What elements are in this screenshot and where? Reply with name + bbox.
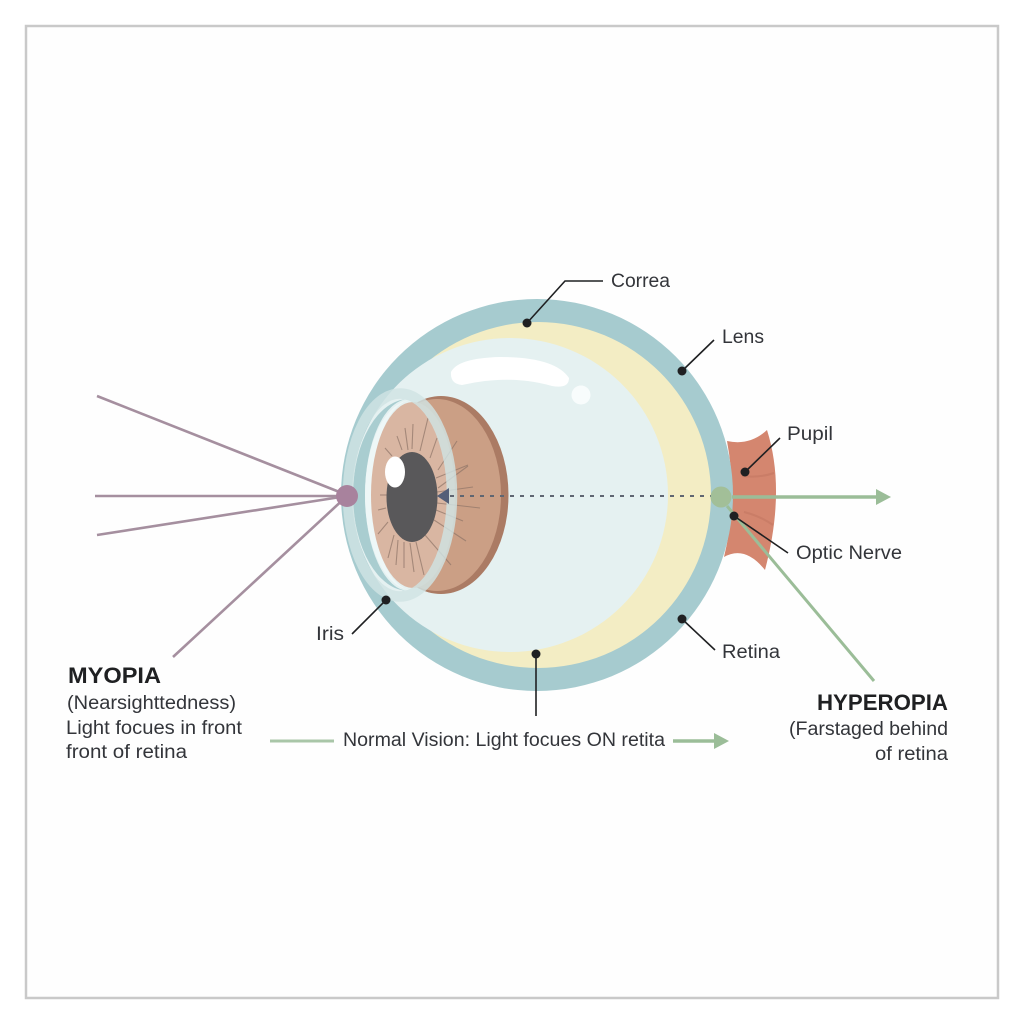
myopia text block: (Nearsighttedness): [67, 693, 236, 714]
vitreous body: [352, 338, 668, 652]
myopia focal point: [336, 485, 358, 507]
hyperopia ray: [727, 506, 874, 681]
iris disc body: [373, 399, 501, 591]
eyeball: [341, 299, 733, 691]
label: Lens: [678, 327, 764, 376]
hyperopia text block: of retina: [875, 744, 948, 765]
label: Lens: Lens: [722, 327, 764, 348]
hyperopia text block: [789, 690, 948, 765]
cornea ring overlay: [348, 394, 452, 596]
top highlight: [451, 357, 569, 387]
label: Pupil: [740, 424, 833, 476]
label: Optic Nerve: [730, 512, 902, 564]
normal vision caption with arrow: [270, 730, 729, 751]
label: Retina: Retina: [722, 642, 780, 663]
lens white crescent: [365, 400, 412, 590]
label: Pupil: Pupil: [787, 424, 833, 445]
label: Retina: [678, 614, 780, 663]
iris disc back: [374, 396, 508, 594]
iris radial fibres: [378, 418, 480, 575]
pupil highlight: [385, 456, 405, 488]
label: Correa: [522, 271, 670, 328]
label: Optic Nerve: Optic Nerve: [796, 543, 902, 564]
normal vision caption with arrow: Normal Vision: Light focues ON retita: [343, 730, 665, 751]
optic nerve: [724, 430, 776, 570]
myopia light rays: [95, 396, 347, 657]
arrowhead at iris: [437, 488, 449, 504]
yellow choroid layer: [365, 322, 711, 668]
hyperopia text block: HYPEROPIA: [817, 690, 948, 715]
hyperopia text block: (Farstaged behind: [789, 719, 948, 740]
myopia text block: MYOPIA: [68, 663, 161, 688]
pupil: [386, 452, 438, 542]
sclera outer layer: [341, 299, 733, 691]
myopia text block: [66, 663, 243, 763]
iris front face: [371, 402, 455, 588]
lens teal crescent: [353, 399, 409, 591]
label: Iris: Iris: [316, 624, 344, 645]
small highlight: [572, 386, 590, 404]
green exit arrow: [732, 489, 891, 505]
hyperopia focal point: [710, 486, 732, 508]
normal vision pointer: [532, 650, 540, 716]
myopia text block: Light focues in front: [66, 718, 243, 739]
label: Correa: Correa: [611, 271, 670, 292]
myopia text block: front of retina: [66, 742, 187, 763]
label: Iris: [316, 596, 390, 645]
central focal dashed line: [450, 495, 712, 497]
